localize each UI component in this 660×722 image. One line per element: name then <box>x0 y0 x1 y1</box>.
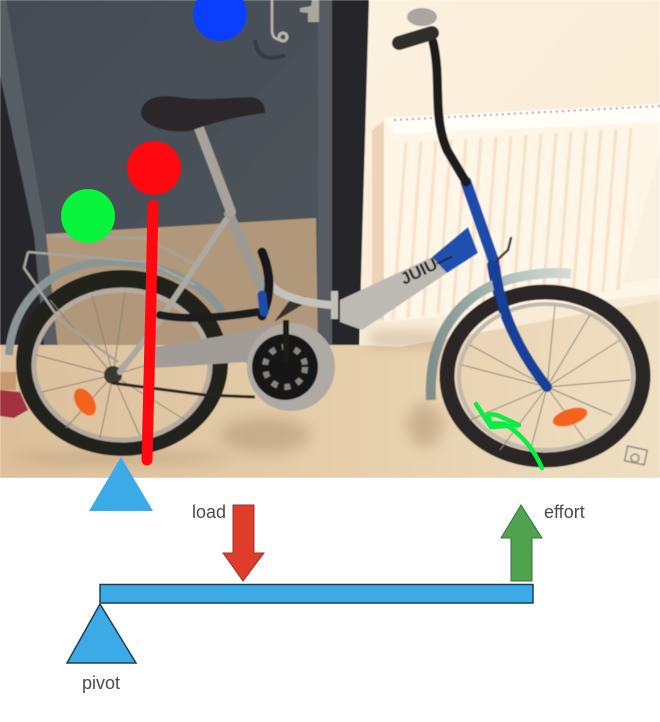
front reflector <box>550 404 590 430</box>
radiator <box>384 104 660 322</box>
marker: red vertical line <box>147 205 153 460</box>
door frame left <box>0 0 67 373</box>
door handle <box>255 0 319 58</box>
rear reflector <box>69 385 101 419</box>
handlebar grip <box>399 8 437 43</box>
effort arrow <box>501 505 542 581</box>
saddle <box>141 96 265 132</box>
door <box>0 0 330 350</box>
rear rack <box>24 236 197 362</box>
marker: blue circle <box>193 0 247 41</box>
load label: load <box>192 502 226 522</box>
load arrow <box>223 505 264 581</box>
front fork lower <box>495 266 547 387</box>
front mudguard <box>431 273 571 400</box>
chain guard and chainring <box>112 296 335 411</box>
brush at left edge <box>0 372 28 418</box>
rear hub <box>104 366 122 384</box>
rear spokes <box>36 292 200 438</box>
rear wheel <box>9 262 222 447</box>
rear mudguard <box>9 262 222 355</box>
pivot triangle <box>67 604 136 663</box>
marker: red circle <box>127 141 181 195</box>
pivot triangle on photo <box>89 457 153 511</box>
front wheel <box>431 266 643 460</box>
wall shadow beside radiator <box>372 120 385 320</box>
lever beam <box>100 584 533 603</box>
photo: folding bicycle <box>0 0 660 478</box>
pivot label: pivot <box>82 673 120 693</box>
door lower tan panel <box>46 218 318 350</box>
floor shadows <box>10 332 443 464</box>
marker: green scribble on front wheel <box>476 404 542 468</box>
wall <box>360 0 660 350</box>
bell <box>407 8 437 26</box>
effort label: effort <box>544 502 585 522</box>
lever diagram <box>67 502 585 693</box>
floor <box>0 300 660 478</box>
marker: green circle <box>61 189 115 243</box>
watermark camera icon <box>625 446 647 465</box>
frame lettering: JUIU— <box>397 247 456 289</box>
white lower panel <box>0 478 660 722</box>
door frame right <box>318 0 369 350</box>
bicycle frame <box>120 42 547 387</box>
front spokes <box>462 305 630 452</box>
